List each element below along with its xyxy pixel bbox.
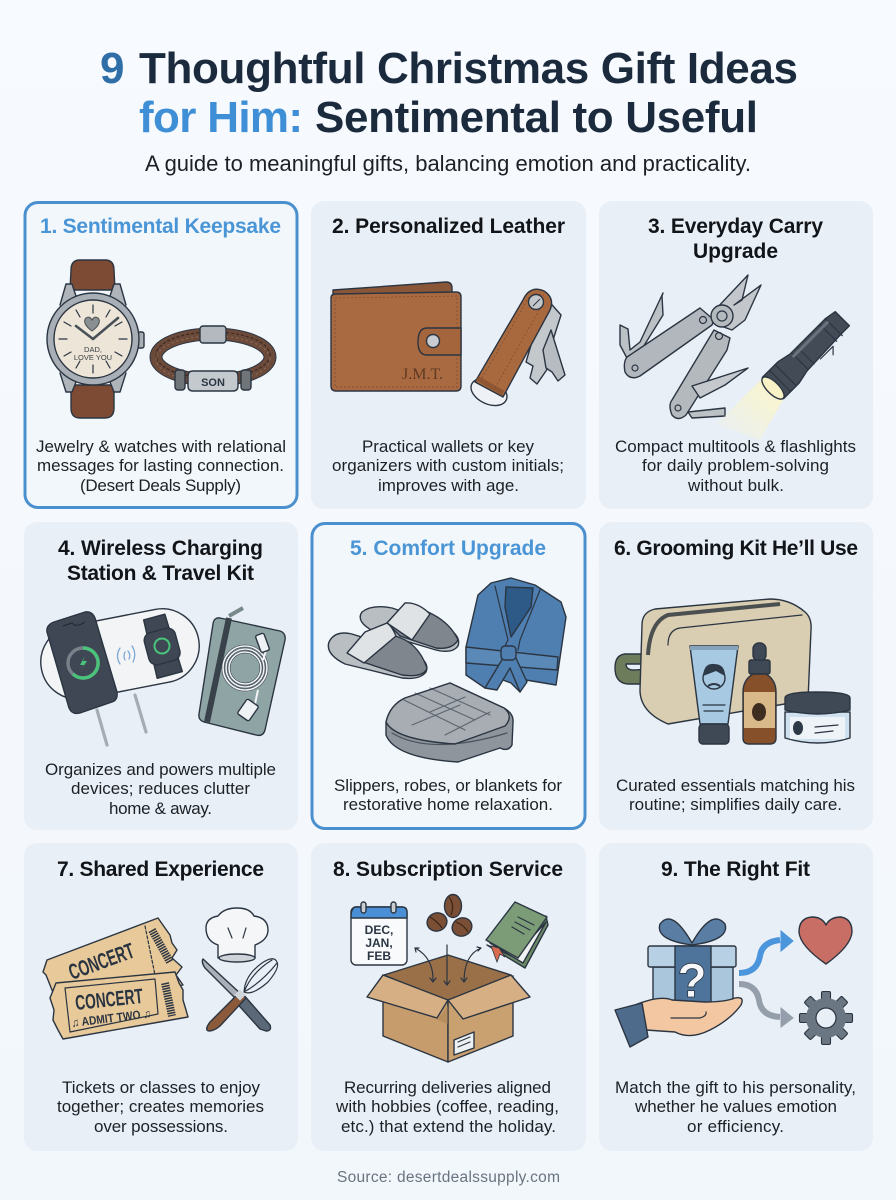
icon: calendar bbox=[351, 902, 407, 965]
heading 4: 4. Wireless Charging bbox=[58, 537, 263, 560]
icon: coffee beans bbox=[425, 894, 475, 939]
description 4: home & away. bbox=[109, 799, 212, 818]
icon: calendar: FEB bbox=[367, 949, 391, 963]
description 2: improves with age. bbox=[378, 476, 519, 495]
description 4: devices; reduces clutter bbox=[71, 779, 250, 798]
icon: leather bracelet: SON bbox=[201, 377, 225, 389]
description 1 bbox=[36, 437, 286, 495]
icon: concert tickets: CONCERT bbox=[65, 938, 138, 985]
heading 8: 8. Subscription Service bbox=[333, 858, 563, 881]
description 1: Jewelry & watches with relational bbox=[36, 437, 286, 456]
description 6: routine; simplifies daily care. bbox=[629, 795, 842, 814]
description 2: Practical wallets or key bbox=[362, 437, 534, 456]
panel: 4. Wireless Charging bbox=[24, 522, 298, 830]
description 9: or efficiency. bbox=[687, 1117, 784, 1136]
icon: chef hat bbox=[206, 908, 268, 962]
icon: blue robe bbox=[466, 578, 566, 692]
icon: knife and whisk bbox=[202, 959, 278, 1031]
icon: engraved watch: LOVE YOU bbox=[74, 353, 112, 362]
heading 3 bbox=[648, 215, 823, 263]
description 7: over possessions. bbox=[94, 1117, 228, 1136]
icon: toiletry bag bbox=[615, 599, 811, 724]
heading 6: 6. Grooming Kit He’ll Use bbox=[614, 537, 858, 560]
icon: cream jar bbox=[785, 692, 850, 743]
icon: travel pouch with cable bbox=[199, 608, 285, 735]
description 3: for daily problem-solving bbox=[642, 456, 829, 475]
panel: 7. Shared Experience bbox=[24, 843, 298, 1151]
panel: 6. Grooming Kit bbox=[599, 522, 873, 830]
icon: cardboard box bbox=[367, 955, 530, 1062]
icon: arrows into box bbox=[415, 945, 481, 985]
description 8: with hobbies (coffee, reading, bbox=[335, 1097, 559, 1116]
heading 3: Upgrade bbox=[693, 240, 778, 263]
icon: heart bbox=[799, 917, 852, 964]
icon: mystery gift: ? bbox=[677, 955, 707, 1008]
title: Sentimental to Useful bbox=[315, 93, 758, 142]
description 8 bbox=[335, 1078, 559, 1136]
heading 7: 7. Shared Experience bbox=[57, 858, 264, 881]
icon: concert tickets: ♫ ADMIT TWO ♫ bbox=[71, 1006, 152, 1030]
description 5 bbox=[334, 776, 562, 814]
heading 2: 2. Personalized Leather bbox=[332, 215, 565, 238]
icon: multitool bbox=[620, 275, 761, 418]
icon: charging pad and devices bbox=[34, 602, 206, 745]
panel: 1. Sentimental Keepsake bbox=[25, 202, 297, 508]
panel: 2. Personalized Leather bbox=[311, 201, 586, 509]
description 3 bbox=[615, 437, 856, 495]
description 9: Match the gift to his personality, bbox=[615, 1078, 856, 1097]
icon: engraved watch bbox=[47, 260, 144, 418]
title: 9 bbox=[100, 44, 124, 93]
description 1: (Desert Deals Supply) bbox=[80, 476, 241, 495]
title bbox=[100, 44, 798, 142]
description 2 bbox=[332, 437, 564, 495]
icon: calendar: JAN, bbox=[365, 936, 393, 950]
description 7: Tickets or classes to enjoy bbox=[62, 1078, 260, 1097]
icon: gear bbox=[800, 992, 852, 1044]
icon: beard oil bottle bbox=[743, 643, 776, 744]
panel: 5. Comfort Upgrade bbox=[312, 524, 585, 828]
panel: 9. The Right Fit bbox=[599, 843, 873, 1151]
icon: concert tickets: CONCERT bbox=[74, 985, 144, 1015]
icon: weighted blanket bbox=[386, 683, 513, 762]
description 7: together; creates memories bbox=[57, 1097, 264, 1116]
description 1: messages for lasting connection. bbox=[37, 456, 284, 475]
arrow: to emotion bbox=[739, 931, 793, 973]
description 9: whether he values emotion bbox=[634, 1097, 837, 1116]
icon: green book bbox=[486, 902, 548, 968]
icon: concert tickets bbox=[43, 918, 188, 1039]
icon: leather wallet: J.M.T. bbox=[402, 366, 443, 383]
heading 9: 9. The Right Fit bbox=[661, 858, 810, 881]
heading 3: 3. Everyday Carry bbox=[648, 215, 823, 238]
panel: 8. Subscription Service bbox=[311, 843, 586, 1151]
subtitle: A guide to meaningful gifts, balancing emotion and practicality. bbox=[145, 151, 751, 176]
description 6: Curated essentials matching his bbox=[616, 776, 855, 795]
description 9 bbox=[615, 1078, 856, 1136]
icon: engraved watch: DAD, bbox=[84, 345, 102, 354]
icon: mystery gift bbox=[648, 919, 736, 1012]
icon: leather wallet bbox=[331, 282, 461, 391]
icon: calendar: DEC, bbox=[365, 923, 393, 937]
description 3: Compact multitools & flashlights bbox=[615, 437, 856, 456]
icon: face wash tube bbox=[690, 646, 738, 744]
heading 4 bbox=[58, 537, 263, 585]
icon: slippers bbox=[328, 603, 459, 678]
icon: leather bracelet bbox=[156, 326, 270, 391]
description 5: restorative home relaxation. bbox=[343, 795, 553, 814]
icon: open hand bbox=[615, 998, 742, 1047]
heading 1: 1. Sentimental Keepsake bbox=[40, 215, 281, 238]
icon: leather key organizer bbox=[467, 289, 565, 411]
arrow: to efficiency bbox=[739, 984, 793, 1027]
panel: 3. Everyday Carry Upgrade bbox=[599, 201, 873, 509]
heading 5: 5. Comfort Upgrade bbox=[350, 537, 546, 560]
title: for Him: bbox=[139, 93, 303, 142]
description 4 bbox=[45, 760, 276, 818]
description 8: Recurring deliveries aligned bbox=[344, 1078, 551, 1097]
title: Thoughtful Christmas Gift Ideas bbox=[139, 44, 798, 93]
description 7 bbox=[57, 1078, 264, 1136]
source: Source: desertdealssupply.com bbox=[337, 1169, 560, 1186]
description 5: Slippers, robes, or blankets for bbox=[334, 776, 562, 795]
description 2: organizers with custom initials; bbox=[332, 456, 564, 475]
heading 4: Station & Travel Kit bbox=[67, 562, 254, 585]
description 8: etc.) that extend the holiday. bbox=[341, 1117, 556, 1136]
description 6 bbox=[616, 776, 855, 814]
icon: flashlight bbox=[716, 308, 856, 440]
description 4: Organizes and powers multiple bbox=[45, 760, 276, 779]
description 3: without bulk. bbox=[687, 476, 784, 495]
